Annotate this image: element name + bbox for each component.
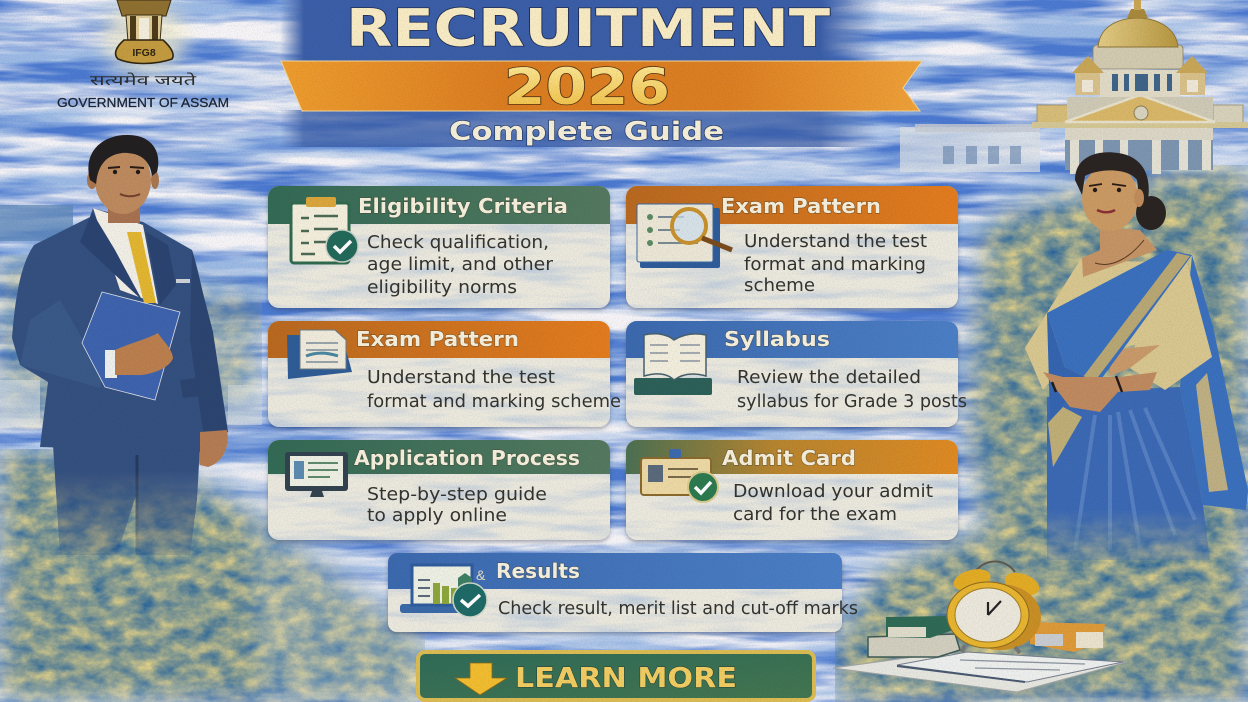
description [367,485,547,526]
description [733,482,933,525]
description: Step-by-step guide [367,485,547,505]
subtitle: complete guide: Complete Guide [449,117,724,147]
heading: Syllabus [724,327,830,351]
card: eligibility criteria [268,186,610,308]
description: syllabus for Grade 3 posts [737,392,967,412]
icon: laptop results chart with check: & [476,567,486,583]
title: recruitment: RECRUITMENT [346,0,831,59]
description: scheme [744,276,815,296]
icon: test sheet with magnifier [637,204,732,268]
description: to apply online [367,506,507,526]
orange ribbon banner with year [281,58,922,116]
description: Check qualification, [367,233,549,253]
description [367,233,554,298]
title band [280,0,880,147]
icon: download arrow [455,663,507,695]
card: application process [268,440,610,540]
description [744,232,927,296]
description: card for the exam [733,505,897,525]
card: admit card [626,440,958,540]
blue folder [82,292,180,400]
button: learn more [418,652,814,700]
card: syllabus [626,321,967,427]
description: Check result, merit list and cut-off marks [498,599,858,619]
building: domed state capitol [900,0,1248,174]
card: exam pattern top [626,186,958,308]
motto text under emblem: सत्यमेव जयते [90,72,198,88]
woman in blue saree [1025,152,1248,560]
emblem: national emblem of India: IFG8 [132,47,156,59]
clock and books [833,562,1127,692]
description: Understand the test [367,368,555,388]
icon: open book [634,334,712,395]
emblem: national emblem of India [102,0,186,74]
description: age limit, and other [367,255,554,275]
description: format and marking [744,255,926,275]
icon: clipboard with check [291,197,358,263]
icon: computer monitor [285,452,348,497]
description [737,368,967,412]
description: format and marking scheme [367,392,621,412]
description: Review the detailed [737,368,921,388]
man in navy suit [12,135,228,555]
heading: Exam Pattern [356,327,519,351]
icon: notebook [287,330,352,379]
description: eligibility norms [367,278,517,298]
heading: Eligibility Criteria [358,194,568,218]
icon: laptop results chart with check [400,565,487,617]
heading: Admit Card [722,446,856,470]
description: Understand the test [744,232,927,252]
heading: Results [496,559,580,583]
description [367,368,621,412]
card: exam pattern left [268,321,621,427]
icon: admit card with check [641,449,718,502]
heading: Application Process [354,446,580,470]
orange ribbon banner with year: 2026 [504,58,670,116]
heading: Exam Pattern [721,194,881,218]
description: Download your admit [733,482,933,502]
card: results [388,553,858,632]
button: learn more: LEARN MORE [515,661,737,694]
government of assam label: GOVERNMENT OF ASSAM [57,95,229,110]
